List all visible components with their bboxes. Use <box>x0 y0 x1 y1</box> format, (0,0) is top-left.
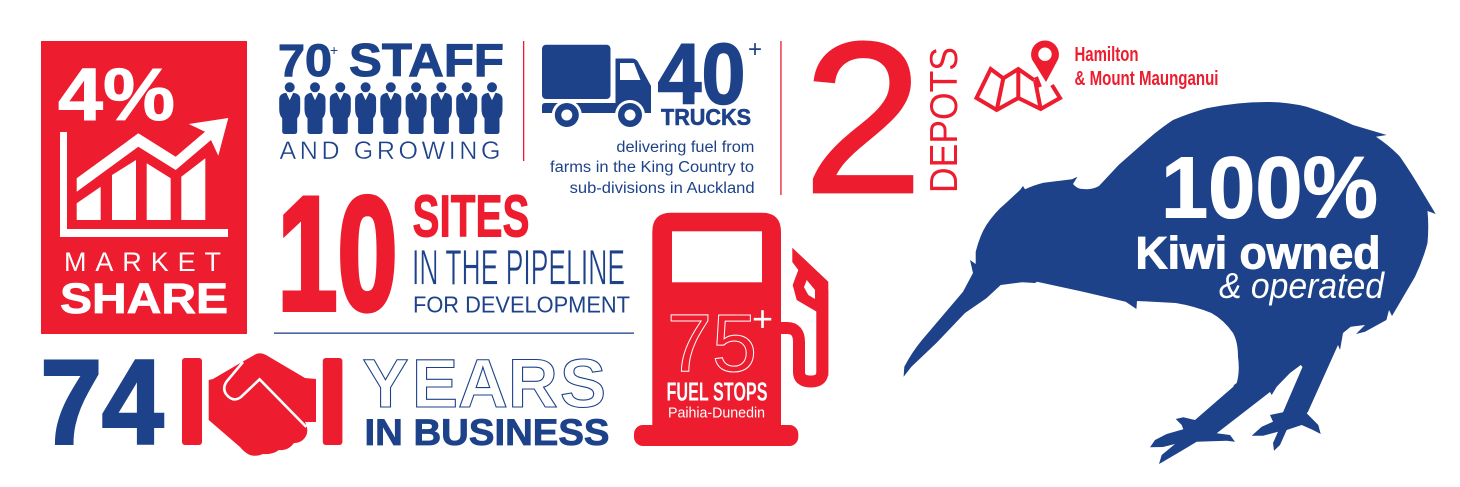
panel: trucks <box>542 26 762 197</box>
staff label: STAFF <box>349 34 504 86</box>
delivery description: sub-divisions in Auckland <box>570 180 755 197</box>
icon: handshake <box>182 353 342 456</box>
icon: truck <box>542 45 651 130</box>
in the pipeline label: IN THE PIPELINE <box>412 238 625 295</box>
red background <box>41 41 247 334</box>
operated label: & operated <box>1219 265 1385 306</box>
market label: MARKET <box>64 247 221 277</box>
70 figure: 70 <box>278 35 332 86</box>
75 figure: 75 <box>667 298 757 389</box>
trucks label: TRUCKS <box>661 104 751 130</box>
panel: fuel stops <box>634 213 828 446</box>
depot locations: & Mount Maunganui <box>1074 68 1218 90</box>
panel: market share <box>41 41 247 334</box>
for development label: FOR DEVELOPMENT <box>413 292 630 318</box>
depot locations: Hamilton <box>1074 44 1138 66</box>
years label: YEARS <box>362 345 606 422</box>
icon: map and pin <box>976 40 1060 110</box>
4% figure: 4% <box>58 53 175 136</box>
icon: row of people <box>279 82 502 134</box>
panel: sites in the pipeline <box>278 164 630 344</box>
panel: staff <box>278 34 504 165</box>
big number 2: 2 <box>803 0 923 238</box>
100% figure: 100% <box>1161 140 1378 236</box>
delivery description <box>550 139 755 197</box>
40 figure: 40 <box>658 26 746 122</box>
panel: kiwi owned <box>904 102 1436 464</box>
share label: SHARE <box>60 275 228 323</box>
and growing label: AND GROWING <box>280 137 500 165</box>
delivery description: farms in the King Country to <box>550 159 754 176</box>
route label: Paihia-Dunedin <box>668 405 765 421</box>
in business label: IN BUSINESS <box>364 412 610 453</box>
74 figure: 74 <box>40 336 164 470</box>
icon: kiwi silhouette <box>904 102 1436 464</box>
panel: depots <box>803 0 1218 238</box>
panel: years in business <box>40 336 610 470</box>
plus sign: + <box>330 42 338 58</box>
plus sign: + <box>752 298 773 339</box>
depot locations <box>1074 44 1218 90</box>
delivery description: delivering fuel from <box>616 139 754 156</box>
kiwi owned label: Kiwi owned <box>1136 228 1380 278</box>
sites label: SITES <box>412 184 530 250</box>
icon: rising chart <box>60 118 228 237</box>
plus sign: + <box>748 36 762 63</box>
icon: fuel pump <box>634 213 828 446</box>
big number 10: 10 <box>278 164 398 344</box>
depots label: DEPOTS <box>923 47 966 193</box>
fuel stops label: FUEL STOPS <box>666 376 768 406</box>
